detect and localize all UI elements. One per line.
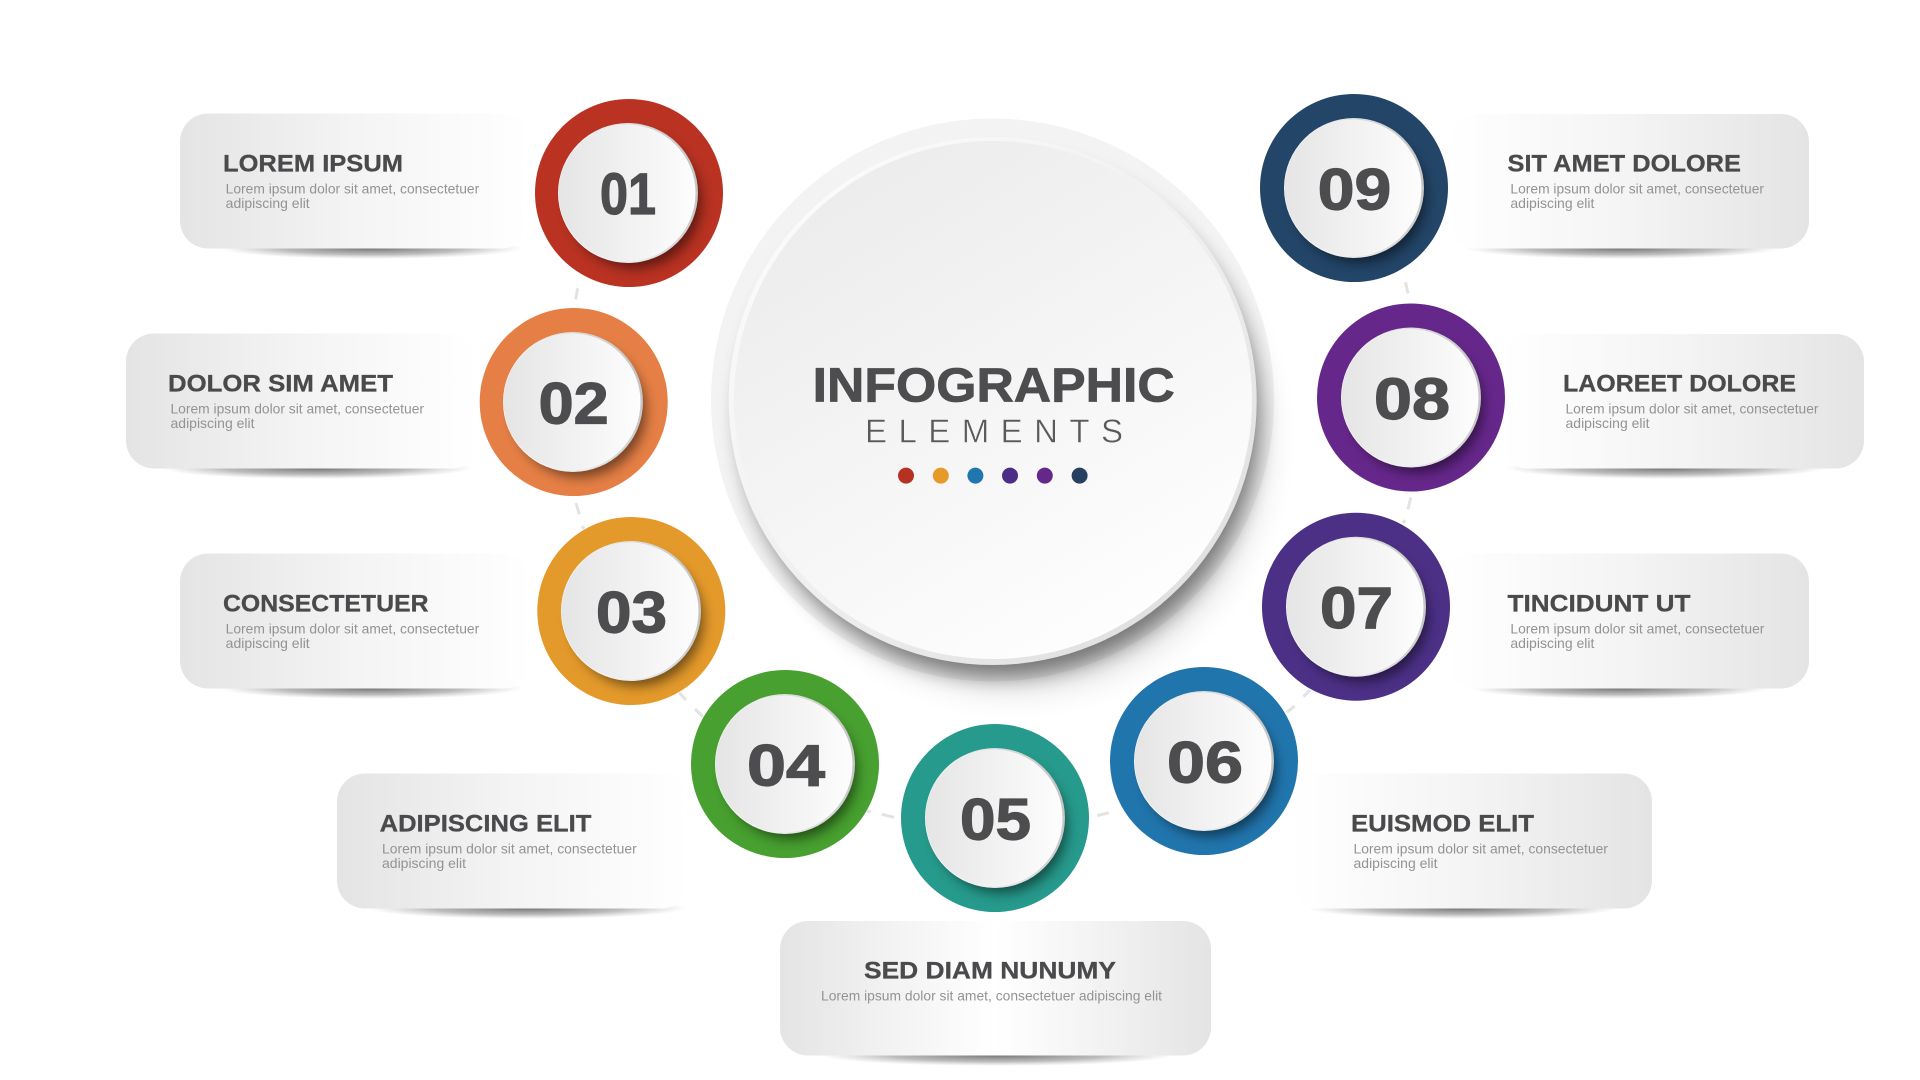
marker 07: 07: [1320, 576, 1393, 641]
marker 04: 04: [747, 734, 825, 798]
panel 08: Laoreet Dolore: [1500, 334, 1864, 479]
marker 09: [1260, 94, 1448, 282]
marker 08: 08: [1374, 367, 1450, 432]
panel 06: Euismod Elit: adipiscing elit: [1354, 856, 1438, 871]
marker 08: [1317, 304, 1505, 492]
marker 02: [480, 308, 668, 496]
marker 05: 05: [960, 788, 1031, 852]
panel 02: Dolor Sim Amet: Lorem ipsum dolor sit amet, consectetuer: [170, 402, 424, 416]
panel 07: Tincidunt Ut: Lorem ipsum dolor sit amet, consectetuer: [1510, 621, 1765, 636]
panel 01: Lorem Ipsum: Lorem ipsum dolor sit amet, consectetuer: [226, 182, 480, 196]
panel 03: Consectetuer: adipiscing elit: [226, 636, 310, 651]
connector dashes: [576, 282, 1411, 817]
marker 01: 01: [600, 162, 656, 227]
marker 06: 06: [1167, 730, 1243, 796]
panel 04: Adipiscing Elit: Lorem ipsum dolor sit amet, consectetuer: [382, 841, 637, 856]
panel 08: Laoreet Dolore: LAOREET DOLORE: [1563, 370, 1796, 397]
heading: Infographic: INFOGRAPHIC: [813, 360, 1175, 413]
marker 09: 09: [1318, 158, 1391, 222]
panel 01: Lorem Ipsum: [180, 114, 530, 259]
panel 05: Sed Diam Nunumy: [780, 921, 1211, 1066]
marker 01: [535, 99, 723, 287]
panel 06: Euismod Elit: Lorem ipsum dolor sit amet, consectetuer: [1354, 841, 1608, 856]
panel 06: Euismod Elit: [1290, 774, 1652, 919]
panel 09: Sit Amet Dolore: SIT AMET DOLORE: [1508, 151, 1741, 178]
marker 04: [691, 670, 879, 858]
panel 09: Sit Amet Dolore: [1448, 114, 1809, 259]
panel 03: Consectetuer: [180, 554, 532, 699]
marker 06: [1110, 667, 1298, 855]
subheading: Elements: ELEMENTS: [865, 412, 1123, 449]
panel 08: Laoreet Dolore: Lorem ipsum dolor sit amet, consectetuer: [1566, 402, 1819, 417]
panel 07: Tincidunt Ut: TINCIDUNT UT: [1508, 591, 1691, 618]
panel 08: Laoreet Dolore: adipiscing elit: [1566, 416, 1650, 431]
marker 03: [537, 517, 725, 705]
panel 05: Sed Diam Nunumy: Lorem ipsum dolor sit amet, consectetuer adipiscing elit: [821, 988, 1162, 1004]
panel 04: Adipiscing Elit: adipiscing elit: [382, 856, 466, 871]
panel 05: Sed Diam Nunumy: SED DIAM NUNUMY: [864, 957, 1116, 984]
panel 04: Adipiscing Elit: ADIPISCING ELIT: [380, 811, 591, 838]
panel 02: Dolor Sim Amet: [126, 334, 480, 479]
panel 09: Sit Amet Dolore: adipiscing elit: [1510, 196, 1595, 211]
colour dots: [898, 468, 1088, 484]
centre disc with title: [711, 118, 1274, 686]
panel 07: Tincidunt Ut: adipiscing elit: [1510, 636, 1595, 651]
marker 07: [1262, 513, 1450, 701]
panel 03: Consectetuer: CONSECTETUER: [223, 590, 429, 618]
panel 06: Euismod Elit: EUISMOD ELIT: [1351, 811, 1534, 838]
panel 01: Lorem Ipsum: LOREM IPSUM: [223, 151, 403, 178]
marker 02: 02: [539, 372, 609, 436]
panel 03: Consectetuer: Lorem ipsum dolor sit amet, consectetuer: [226, 621, 480, 636]
marker 03: 03: [596, 580, 667, 646]
panel 01: Lorem Ipsum: adipiscing elit: [226, 196, 310, 211]
panel 02: Dolor Sim Amet: DOLOR SIM AMET: [168, 370, 393, 397]
panel 07: Tincidunt Ut: [1445, 554, 1809, 699]
panel 02: Dolor Sim Amet: adipiscing elit: [170, 416, 255, 431]
panel 04: Adipiscing Elit: [337, 774, 690, 919]
panel 09: Sit Amet Dolore: Lorem ipsum dolor sit amet, consectetuer: [1510, 182, 1764, 197]
marker 05: [901, 724, 1089, 912]
